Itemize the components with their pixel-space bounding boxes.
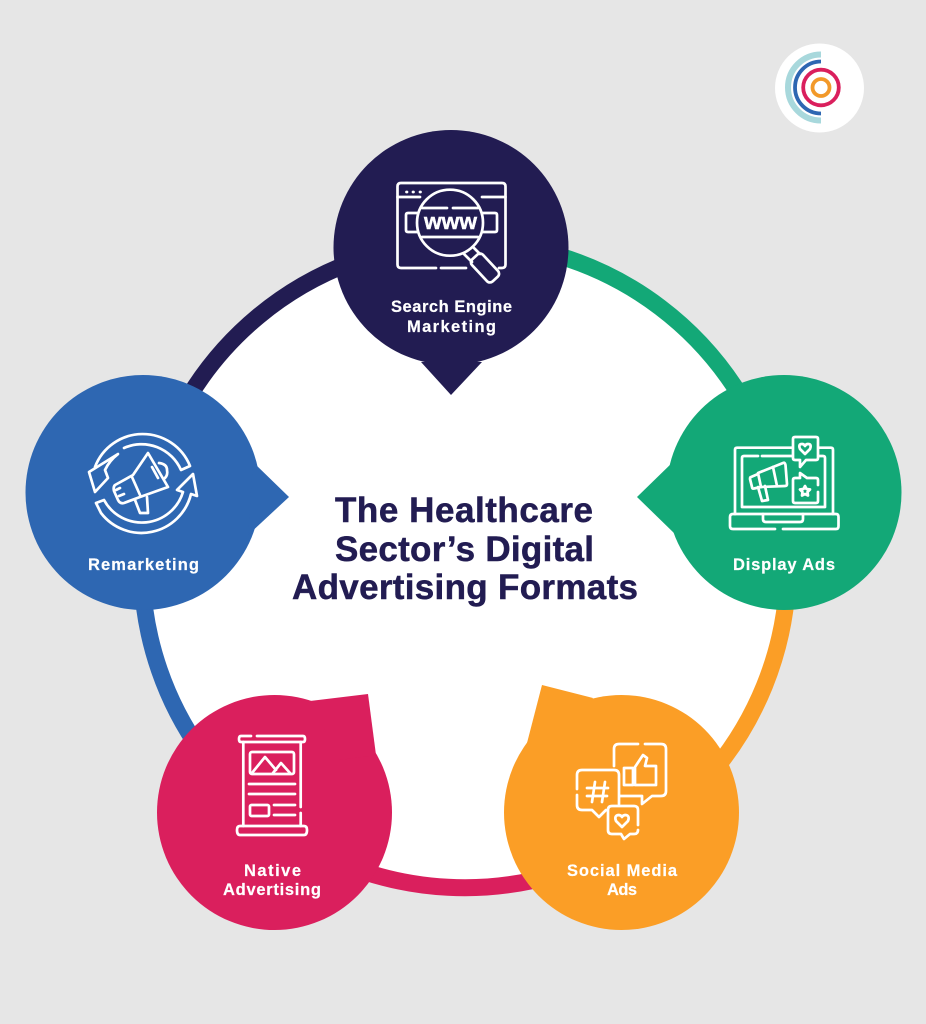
panel: Social Media Ads: Social Media — [567, 862, 678, 880]
icon: social speech bubbles — [577, 744, 666, 839]
panel: Display Ads: Display Ads — [733, 556, 835, 574]
panel: Display Ads — [637, 375, 902, 610]
ring: coloured segments — [142, 242, 788, 888]
title: Advertising Formats — [292, 568, 638, 607]
title: Sector’s Digital — [335, 530, 594, 569]
panel: Native Advertising: Native — [244, 862, 301, 880]
icon: megaphone with circular arrows — [89, 434, 197, 533]
panel: Remarketing — [26, 375, 289, 610]
panel: Search Engine Marketing — [334, 130, 568, 395]
central white disc — [142, 242, 788, 888]
panel: Remarketing: Remarketing — [88, 556, 199, 574]
icon: laptop with megaphone and bubbles — [730, 437, 838, 529]
title — [292, 491, 638, 607]
panel: Social Media Ads — [504, 685, 739, 930]
icon: roll-up banner — [237, 736, 307, 835]
logo — [775, 44, 864, 132]
panel: Search Engine Marketing: Search Engine — [391, 298, 512, 316]
title: The Healthcare — [335, 491, 593, 530]
panel: Native Advertising: Advertising — [223, 881, 321, 899]
panel: Native Advertising — [157, 694, 392, 930]
panel: Search Engine Marketing: www — [423, 209, 477, 234]
panel: Social Media Ads: Ads — [607, 881, 637, 899]
panel: Search Engine Marketing: Marketing — [407, 318, 496, 336]
icon: browser with magnifying glass — [398, 183, 506, 284]
